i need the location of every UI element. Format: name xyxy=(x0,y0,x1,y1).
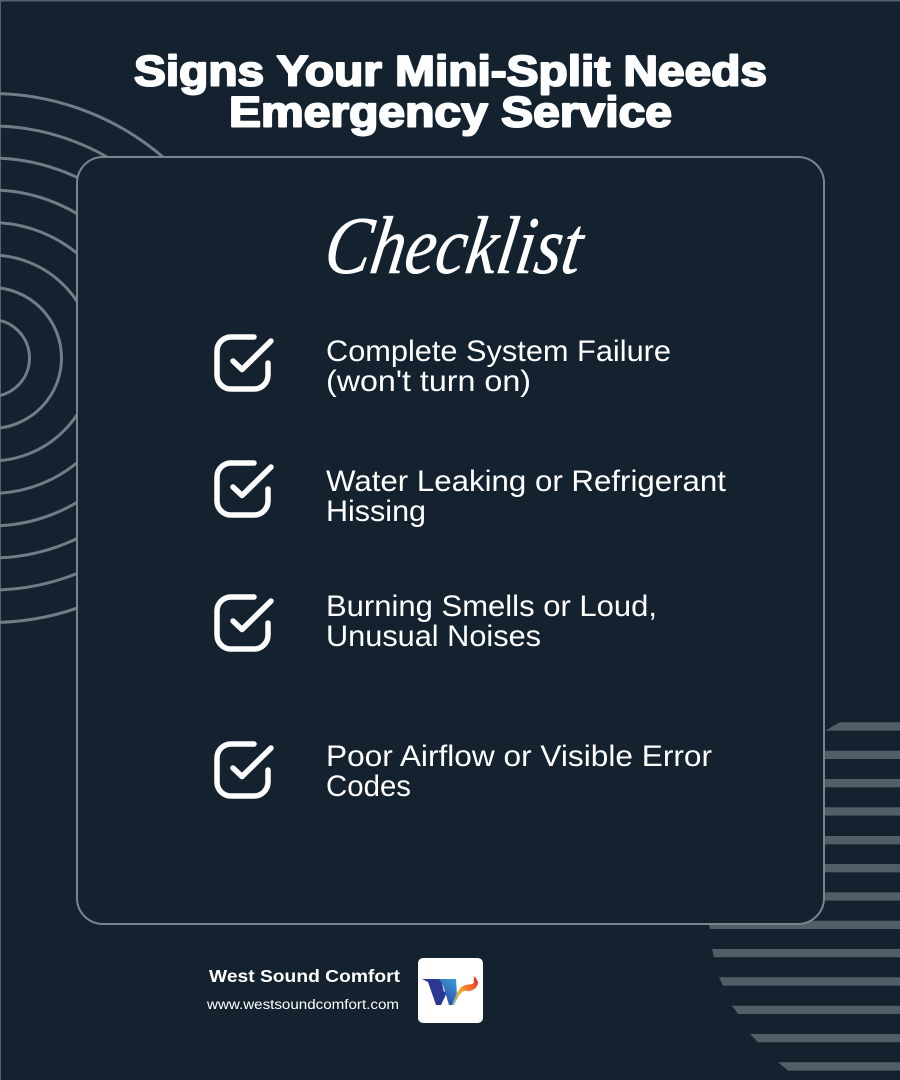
icon: checkbox xyxy=(217,597,271,649)
text: item 2: Water Leaking or Refrigerant xyxy=(326,465,727,498)
heading: Checklist: Checklist xyxy=(319,199,591,291)
footer: company name and website: West Sound Comfort xyxy=(209,966,400,986)
text: item 4 xyxy=(326,740,712,803)
title xyxy=(134,48,767,136)
checklist item 2 xyxy=(217,463,727,528)
text: item 1: (won't turn on) xyxy=(326,365,531,398)
checklist item 3 xyxy=(217,590,657,653)
text: item 2: Hissing xyxy=(326,495,426,528)
footer: company name and website xyxy=(206,966,400,1012)
checklist item 4 xyxy=(217,740,712,803)
decorative concentric arcs xyxy=(0,94,256,622)
icon: checkbox xyxy=(217,744,271,796)
footer: company name and website: www.westsoundcomfort.com xyxy=(206,997,399,1012)
text: item 4: Codes xyxy=(326,770,411,803)
text: item 3: Burning Smells or Loud, xyxy=(326,590,657,623)
title: Emergency Service xyxy=(229,90,672,136)
text: item 4: Poor Airflow or Visible Error xyxy=(326,740,712,773)
text: item 2 xyxy=(326,465,727,528)
icon: checkbox xyxy=(217,337,271,389)
decorative stripes xyxy=(708,722,900,1071)
title: Signs Your Mini-Split Needs xyxy=(134,48,767,96)
text: item 3 xyxy=(326,590,657,653)
checklist item 1 xyxy=(217,335,671,398)
text: item 1: Complete System Failure xyxy=(326,335,671,368)
panel: checklist xyxy=(77,157,824,924)
text: item 3: Unusual Noises xyxy=(326,620,541,653)
logo xyxy=(418,958,483,1023)
text: item 1 xyxy=(326,335,671,398)
icon: checkbox xyxy=(217,463,271,515)
